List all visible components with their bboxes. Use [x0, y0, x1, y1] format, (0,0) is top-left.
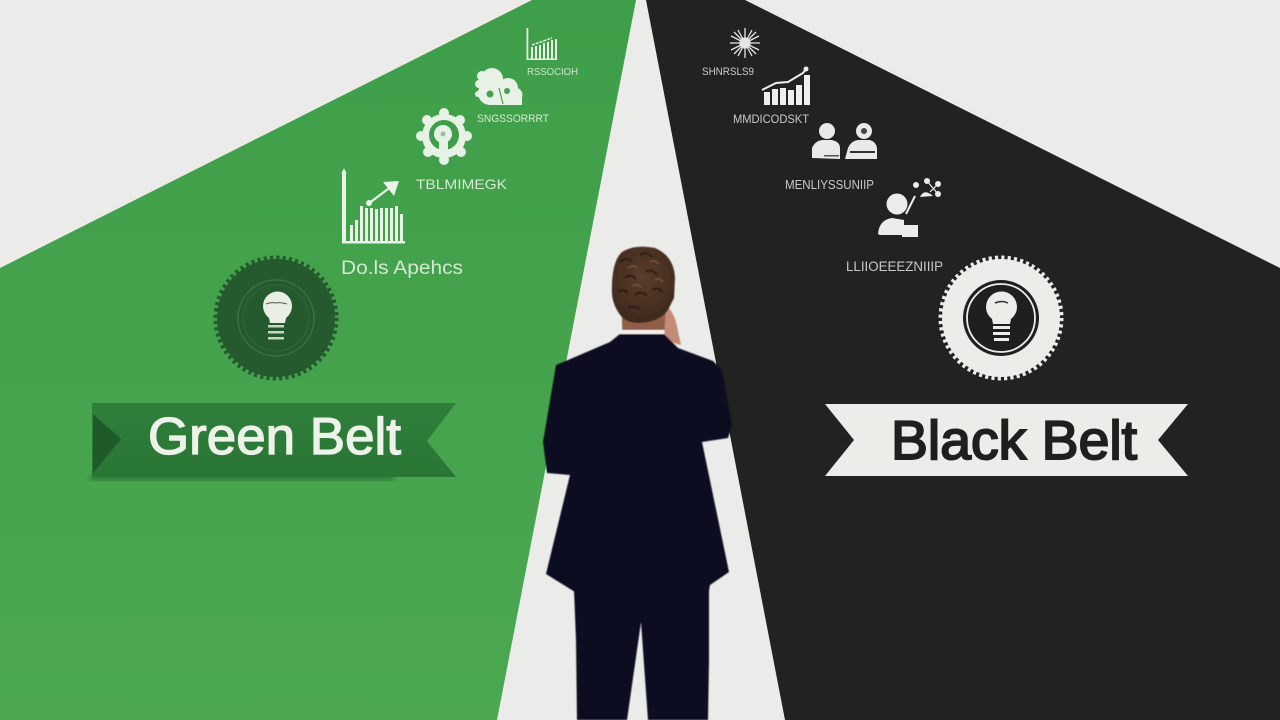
- label: management: MMDICODSKT: [733, 114, 809, 126]
- pants: [574, 590, 709, 720]
- hair: [612, 247, 675, 323]
- green belt career path: [341, 28, 578, 279]
- icon: two people: [812, 123, 877, 159]
- jacket: [543, 334, 732, 596]
- icon: gear cluster: [475, 68, 522, 105]
- figure: businessman seen from behind: [543, 247, 732, 720]
- icon: starburst: [730, 28, 760, 58]
- label: data analytics: Do.ls Apehcs: [341, 258, 463, 279]
- icon: small bar chart: [526, 28, 557, 60]
- ribbon: green belt: [90, 403, 456, 480]
- neck: [622, 310, 668, 330]
- heading: black belt: Black Belt: [891, 409, 1137, 471]
- icon: growth chart: [762, 66, 810, 105]
- raised hand: [664, 305, 681, 345]
- black belt career path: [702, 28, 943, 274]
- label: strategy: SHNRSLS9: [702, 66, 754, 78]
- panel: green belt wedge: [0, 0, 636, 720]
- icon: green belt badge: [216, 258, 336, 378]
- label: research: RSSOCIOH: [527, 67, 578, 78]
- heading: green belt: Green Belt: [148, 408, 402, 466]
- shirt collar: [620, 326, 666, 336]
- ribbon: black belt: [825, 404, 1188, 476]
- label: teamwork: TBLMIMEGK: [416, 176, 508, 192]
- icon: gear with bulb: [416, 108, 472, 165]
- label: mentorship: MENLIYSSUNIIP: [785, 177, 874, 192]
- panel: black belt wedge: [646, 0, 1280, 720]
- icon: large bar chart with arrow: [342, 168, 405, 244]
- label: support: SNGSSORRRT: [477, 113, 549, 125]
- icon: person with network: [878, 178, 941, 237]
- icon: black belt badge: [940, 258, 1062, 378]
- label: leadership: LLIIOEEEZNIIIP: [846, 258, 943, 274]
